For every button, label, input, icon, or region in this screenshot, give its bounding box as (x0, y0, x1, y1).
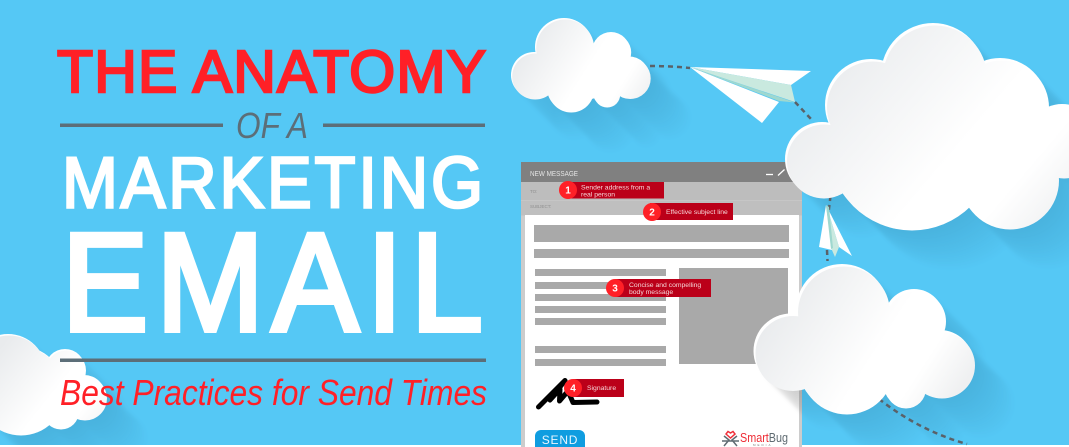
title bar label: NEW MESSAGE (530, 169, 578, 178)
logo icon (722, 432, 739, 446)
callout 3: Concise and compelling (629, 282, 701, 289)
cloud: bottom right (754, 264, 975, 414)
lower cloud shadow on window (773, 386, 802, 414)
title line: marketing: MARKETING (62, 144, 486, 224)
subtitle: Best Practices for Send Times (60, 372, 487, 413)
paper plane: top (690, 67, 811, 123)
callout 2 (643, 203, 733, 221)
callout 3 (606, 279, 711, 297)
send button: SEND (542, 433, 578, 447)
callout 2: Effective subject line (666, 209, 728, 216)
dashed flight paths (650, 66, 967, 444)
callout 4: 4 (570, 384, 576, 394)
send button (535, 430, 585, 447)
callout 1: Sender address from a (581, 184, 650, 192)
window frame (521, 162, 802, 447)
callout 2: 2 (649, 208, 655, 218)
to row: TO: (530, 189, 537, 194)
cloud: top left (511, 18, 651, 112)
logo subtitle: MEDIA (753, 443, 773, 447)
email window (521, 162, 802, 447)
subtitle rule (60, 358, 486, 362)
callout 4: Signature (587, 385, 616, 392)
callout 3: body message (629, 289, 673, 296)
smartbug logo (722, 431, 788, 447)
subject row: SUBJECT: (530, 204, 551, 209)
cloud: bottom left (0, 334, 107, 436)
message body (525, 215, 799, 447)
subject row (521, 200, 802, 216)
callout 1: 1 (565, 186, 571, 196)
callout 3: 3 (612, 284, 618, 294)
logo wordmark: SmartBug (740, 431, 788, 445)
divider with of a: OF A (236, 105, 308, 146)
divider with of a (60, 105, 485, 146)
to row (521, 182, 802, 200)
heading placeholder bars (534, 225, 789, 258)
callout 1: real person (581, 192, 615, 198)
title line: email: EMAIL (62, 205, 491, 360)
cloud: top right (785, 23, 1069, 230)
text placeholder lines (535, 269, 666, 366)
window controls (766, 170, 784, 176)
title block (57, 39, 491, 413)
title bar (521, 162, 802, 182)
signature scribble (538, 380, 597, 407)
title line: the anatomy: THE ANATOMY (57, 39, 486, 105)
callout 1 (559, 181, 664, 199)
image placeholder (679, 268, 788, 364)
paper plane: lower (819, 205, 852, 257)
callout 4 (564, 379, 624, 397)
